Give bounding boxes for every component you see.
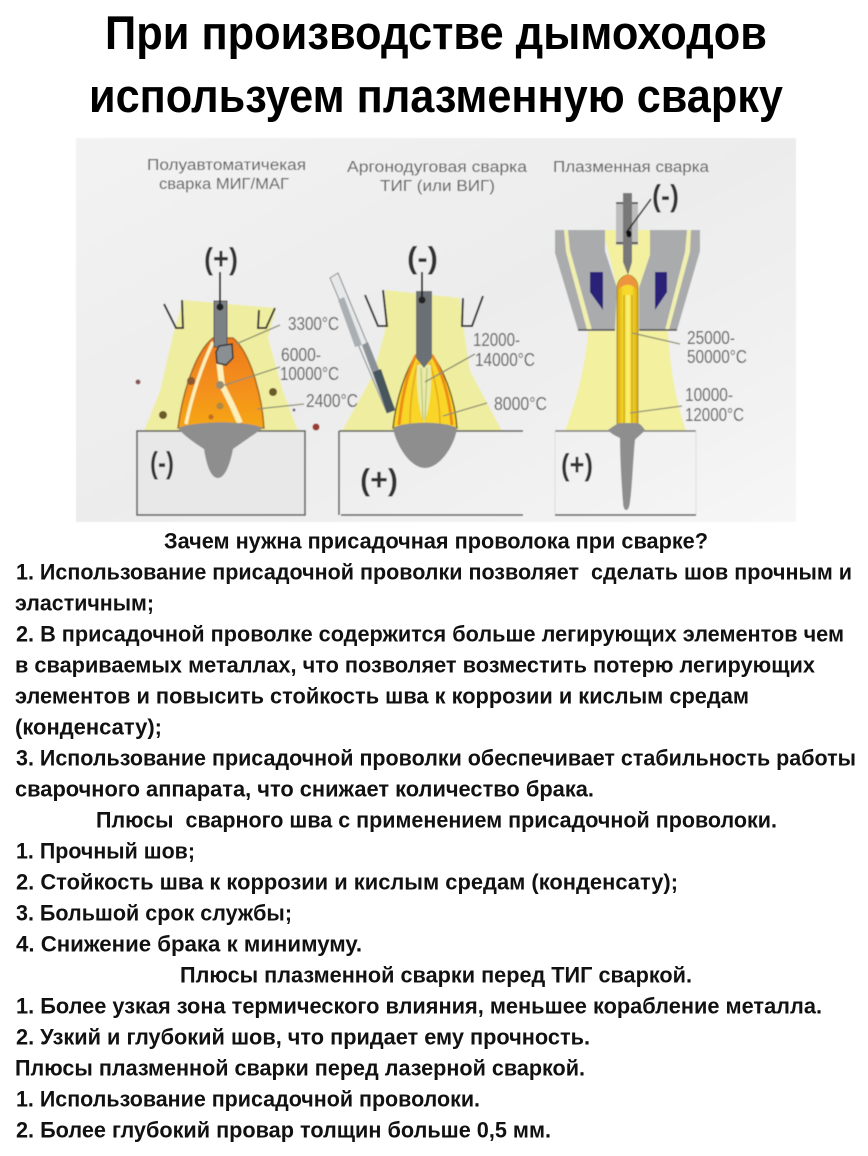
temperatures: 12000°C xyxy=(685,405,744,425)
temperatures xyxy=(473,330,547,414)
diagram: MIG/MAG welding xyxy=(136,157,358,515)
heading: TIG xyxy=(347,159,527,195)
heading: MIG/MAG: сварка МИГ/МАГ xyxy=(159,176,290,193)
text block: why filler wire: в свариваемых металлах, что позволяет возместить потерю легирующих xyxy=(15,652,816,678)
text block: why filler wire: 1. Использование присадочной проволки позволяет сделать шов прочным и xyxy=(16,560,852,584)
diagram: plasma welding xyxy=(553,159,747,515)
label: plus: (+) xyxy=(204,241,238,276)
temperatures: 3300°C xyxy=(288,314,339,334)
text block: why filler wire: 2. В присадочной проволке содержится больше легирующих элементов чем xyxy=(16,622,844,646)
text block: weld pluses: 1. Прочный шов; xyxy=(16,838,195,864)
temperatures: 50000°C xyxy=(687,347,747,367)
label: plus: (+) xyxy=(360,462,398,497)
label: minus: (-) xyxy=(652,178,679,213)
temperatures: 6000- xyxy=(281,345,321,365)
text block: why filler wire: 3. Использование присадочной проволки обеспечивает стабильность работы xyxy=(16,746,856,770)
heading: MIG/MAG xyxy=(147,157,306,193)
diagram: TIG welding xyxy=(330,159,547,515)
text block: weld pluses xyxy=(16,808,777,956)
heading: plasma vs laser: Плюсы плазменной сварки перед лазерной сваркой. xyxy=(15,1056,585,1080)
text block: why filler wire: элементов и повысить стойкость шва к коррозии и кислым средам xyxy=(15,684,749,708)
text block: weld pluses: 4. Снижение брака к минимуму. xyxy=(16,932,362,956)
temperatures xyxy=(685,328,747,425)
text block: weld pluses: 3. Большой срок службы; xyxy=(16,900,292,926)
temperatures: 8000°C xyxy=(494,394,547,414)
temperatures: 2400°C xyxy=(306,391,358,411)
label: minus: (-) xyxy=(150,445,174,480)
text block: why filler wire xyxy=(15,528,856,802)
heading: why filler wire: Зачем нужна присадочная проволока при сварке? xyxy=(164,528,708,554)
text block: weld pluses: 2. Стойкость шва к коррозии и кислым средам (конденсату); xyxy=(16,870,678,894)
icon: plasma jet xyxy=(617,275,638,424)
heading: MIG/MAG: Полуавтоматичекая xyxy=(147,157,306,174)
text block: why filler wire: (конденсату); xyxy=(15,714,162,740)
icon: filler rod xyxy=(330,273,395,413)
temperatures xyxy=(280,314,358,411)
title: При производстве дымоходов xyxy=(105,6,767,59)
text block: plasma vs laser: 2. Более глубокий провар толщин больше 0,5 мм. xyxy=(16,1118,551,1142)
icon: plasma torch xyxy=(555,193,700,330)
text block: plasma vs laser: 1. Использование присадочной проволоки. xyxy=(16,1086,480,1112)
title: используем плазменную сварку xyxy=(89,69,783,122)
temperatures: 14000°C xyxy=(475,350,535,370)
heading: weld pluses: Плюсы сварного шва с применением присадочной проволоки. xyxy=(96,808,777,832)
text block: plasma vs laser xyxy=(15,1056,585,1142)
text block: plasma vs TIG: 1. Более узкая зона термического влияния, меньшее корабление металла. xyxy=(16,994,822,1018)
temperatures: 25000- xyxy=(687,328,735,348)
heading: plasma: Плазменная сварка xyxy=(553,159,709,176)
label: minus: (-) xyxy=(407,240,438,275)
heading: TIG: ТИГ (или ВИГ) xyxy=(380,178,495,195)
text block: why filler wire: эластичным; xyxy=(15,590,154,616)
text block: why filler wire: сварочного аппарата, что снижает количество брака. xyxy=(15,776,594,802)
panel: welding diagrams xyxy=(76,138,796,522)
text block: plasma vs TIG xyxy=(16,962,822,1050)
temperatures: 12000- xyxy=(473,330,520,350)
temperatures: 10000- xyxy=(685,385,733,405)
heading: plasma vs TIG: Плюсы плазменной сварки перед ТИГ сваркой. xyxy=(180,962,692,988)
heading: TIG: Аргонодуговая сварка xyxy=(347,159,527,176)
temperatures: 10000°C xyxy=(280,364,339,384)
title xyxy=(89,6,783,122)
text block: plasma vs TIG: 2. Узкий и глубокий шов, что придает ему прочность. xyxy=(16,1024,590,1050)
label: plus: (+) xyxy=(561,447,593,482)
